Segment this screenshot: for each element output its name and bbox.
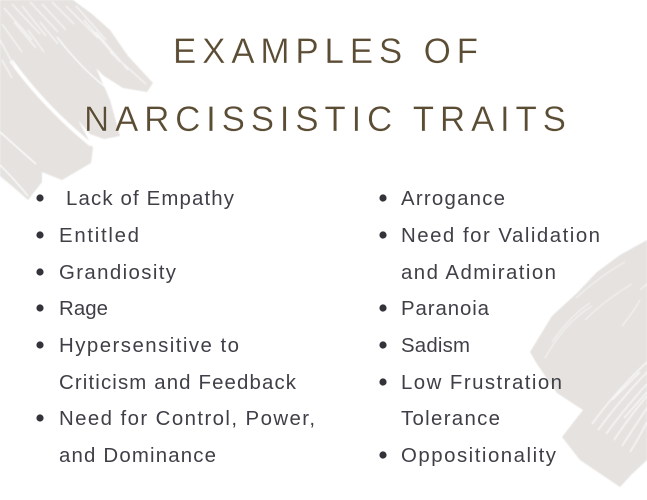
right column list	[379, 188, 600, 467]
right column list: Tolerance	[401, 408, 500, 430]
right column list: Need for Validation	[401, 225, 600, 247]
right column list: and Admiration	[401, 262, 556, 284]
title: EXAMPLES OF	[173, 32, 478, 71]
left column list: Lack of Empathy	[66, 188, 235, 210]
left column list: and Dominance	[59, 445, 216, 467]
left column list: Grandiosity	[59, 262, 177, 284]
brush stroke: top left	[0, 0, 153, 200]
left column list: Criticism and Feedback	[59, 372, 297, 394]
right column list: Oppositionality	[401, 445, 557, 467]
right column list: Arrogance	[401, 188, 505, 210]
right column list: Low Frustration	[401, 372, 562, 394]
brush stroke: bottom right	[530, 240, 647, 487]
left column list: Need for Control, Power,	[59, 408, 315, 430]
left column list: Rage	[59, 298, 108, 320]
right column list: Sadism	[401, 335, 470, 357]
left column list	[36, 188, 315, 467]
title: NARCISSISTIC TRAITS	[84, 100, 566, 139]
left column list: Entitled	[59, 225, 139, 247]
right column list: Paranoia	[401, 298, 490, 320]
left column list: Hypersensitive to	[59, 335, 239, 357]
title	[84, 32, 566, 139]
